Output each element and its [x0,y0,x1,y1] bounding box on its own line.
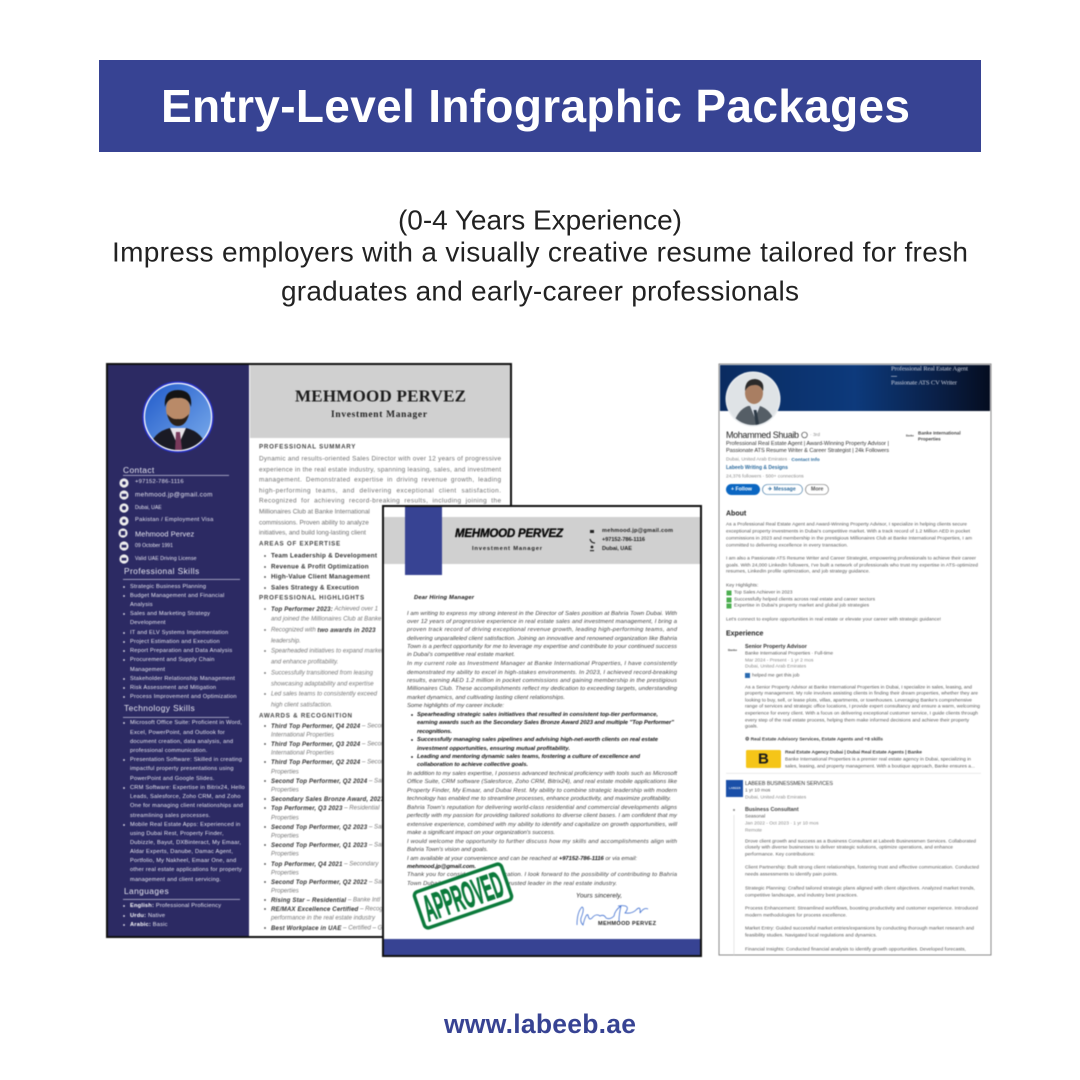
professional skills section: Stakeholder Relationship Management [130,676,235,682]
awards and recognition: Second Top Performer, Q2 2022 – Sales [271,878,389,886]
languages section: Arabic: Basic [130,922,168,928]
technology skills section: CRM Software: Expertise in Bitrix24, Hello [130,785,245,791]
experience section: Labeeb: Business Consultant [745,807,799,813]
letter body text: collaboration to achieve collective goals. [417,762,528,768]
profile banner [720,365,990,411]
experience section: Labeeb: needs assessments to identify pain points. [745,872,838,878]
experience section: Banke: ⚙ Real Estate Advisory Services, Estate Agents and +8 skills [745,736,883,742]
awards and recognition: Properties [271,786,299,794]
letter body text: Town is a perfect opportunity for me to leverage my expertise and contribute to your continued success [407,644,677,650]
profile banner: Professional Real Estate Agent [891,366,968,372]
profile name and headline: Labeeb Writing & Designs [726,465,788,471]
awards and recognition: Properties [271,850,299,858]
experience section: Labeeb: modern methodologies for process excellence. [745,912,847,918]
letter body text: extensive experience, combined with my ability to identify and capitalize on growth opportunities, will [407,822,678,828]
professional highlights: Spearheaded initiatives to expand market [271,648,383,654]
letter body text: over 12 years of progressive experience in real estate sales and investment management, I bring a [407,619,678,625]
about section: commissions in 2023 and membership in the prestigious Millionaires Club at Banke International Properties, I am [726,536,972,542]
awards and recognition: Properties [271,768,299,776]
areas of expertise: Revenue & Profit Optimization [271,564,369,570]
letter body text [406,611,678,887]
awards and recognition: Second Top Performer, Q2 2023 – Sales [271,824,389,830]
icon: profile photo [726,372,780,426]
profile banner: Passionate ATS CV Writer [891,380,958,386]
cover letter footer bar [384,939,700,955]
languages section: English: Professional Proficiency [130,903,221,909]
professional highlights: Recognized with two awards in 2023 [271,626,376,634]
letter body text: results, earning AED 1.2 million in pocket commissions and gaining membership in the prestigious [407,678,677,684]
experience section: Banke: Banke International Properties is a premier real estate agency in Dubai, specializing in [785,756,971,762]
awards and recognition: International Properties [271,750,334,756]
technology skills section: streamlining sales processes. [130,813,211,819]
experience section: Labeeb [726,780,979,955]
letter sign-off and signature: Yours sincerely, [576,892,622,900]
profile name and headline: Professional Real Estate Agent | Award-Winning Property Advisor | [726,441,889,447]
letter body text: Leading and mentoring dynamic sales teams, fostering a culture of excellence and [417,754,640,760]
profile action buttons: More [811,486,824,492]
letter body text: investment opportunities, ensuring mutual profitability. [417,746,570,752]
cover letter header: Investment Manager [472,546,543,552]
professional summary: management. Demonstrated expertise in driving revenue growth, leading [259,476,501,484]
letter body text: In addition to my sales expertise, I possess advanced technical proficiency with tools such as Microsoft [407,771,677,777]
languages section: Languages [124,886,169,896]
contact list with icons: 09 October 1991 [135,543,173,549]
experience section: Banke: experience for every client. With a focus on delivering exceptional customer service, I guide clients through [745,710,978,716]
awards and recognition: Top Performer, Q3 2023 – Residential [271,804,380,812]
technology skills section: professional communication. [130,748,208,754]
experience section: Banke: Experience [726,630,763,638]
panel: LinkedIn profile sample [719,364,991,955]
professional highlights: high client satisfaction. [271,702,332,708]
letter body text: In my current role as Investment Manager at Banke International Properties, I have consistently [407,661,678,667]
about section: resumes, LinkedIn profile optimization, and job strategy guidance. [726,568,870,574]
professional summary: Recognized for achieving record-breaking results, including joining the [259,498,501,504]
cover letter contact details [590,528,673,552]
letter body text: Property Finder, My Emaar, and Dubai Rest. My ability to combine strategic leadership with modern [407,788,678,794]
professional highlights: PROFESSIONAL HIGHLIGHTS [259,594,365,602]
areas of expertise: Team Leadership & Development [271,552,378,560]
experience section: Banke: every step of the real estate process, helping them make informed decisions and achieve their property [745,718,970,724]
professional skills section: Management [130,667,165,673]
professional highlights: showcasing adaptability and expertise [271,680,374,688]
experience section: Banke: Real Estate Agency Dubai | Dubai Real Estate Agents | Banke [785,750,922,756]
awards and recognition: performance in the real estate industry [270,914,376,922]
subtitle text block [112,204,968,306]
letter body text: I am writing to express my strong interest in the Director of Sales position at Bahria Town Dubai. With [407,611,677,617]
awards and recognition: Best Workplace in UAE – Certified – Great [271,924,393,932]
technology skills section: other real estate applications for property [130,867,242,873]
technology skills section: Aldar Experts, Danube, Damac Agent, [130,849,233,855]
profile name and headline: Mohammed Shuaib [726,430,799,440]
professional summary: high-performing teams, and delivering exceptional client satisfaction. [259,488,501,494]
resume sidebar [108,365,249,936]
about section: Let's connect to explore opportunities in real estate or elevate your career with strategic guidance! [726,616,941,622]
experience section: Labeeb: Dubai, United Arab Emirates [745,794,807,800]
experience section: Banke [726,630,981,774]
experience section: Banke: Banke [728,648,737,652]
about section [726,510,978,622]
professional skills section [123,566,240,700]
technology skills section: Excel, PowerPoint, and Outlook for [130,730,225,736]
experience section: Labeeb: Financial Insights: Conducted financial analysis to identify growth opportunities. Developed forecasts, [745,946,966,952]
title banner: Entry-Level Infographic Packages [161,80,910,132]
letter sign-off and signature: MEHMOOD PERVEZ [598,921,657,927]
experience section: Banke: property management. My role involves assisting clients in finding their dream properties, whether they are [745,690,978,696]
resume header with name: Investment Manager [331,410,427,420]
title banner [99,60,981,152]
languages section: Urdu: Native [130,913,165,919]
professional summary: experience in the real estate industry, spanning leasing, sales, and investment [259,466,501,474]
profile action buttons: ✈ Message [768,486,796,492]
technology skills section [123,703,245,883]
professional highlights: and joined the Millionaires Club at Banke [271,616,382,622]
professional summary: PROFESSIONAL SUMMARY [259,444,356,450]
awards and recognition: Properties [271,870,299,876]
experience section: Labeeb: feasibility studies. Navigated local regulations and dynamics. [745,932,877,938]
professional highlights: Successfully transitioned from leasing [271,670,374,676]
experience section: Labeeb: LABEEB [729,786,741,790]
cover letter contact details: Dubai, UAE [602,546,632,552]
awards and recognition: Top Performer, Q4 2021 – Secondary [271,860,379,868]
letter sign-off and signature [576,892,657,927]
professional skills section: Analysis [130,602,153,608]
professional highlights: Top Performer 2023: Achieved over 1 [271,606,378,612]
awards and recognition [259,712,398,932]
letter body text: market dynamics, and cultivating lasting client relationships. [407,695,565,701]
technology skills section: PowerPoint and Google Slides. [130,776,215,782]
experience section: Banke: goals. [745,724,758,730]
areas of expertise [259,540,378,592]
awards and recognition: AWARDS & RECOGNITION [259,712,353,720]
professional highlights: leadership. [271,638,301,644]
professional skills section: Process Improvement and Optimization [130,694,237,700]
contact heading: Contact [123,465,155,475]
profile name and headline: 24,376 followers · 500+ connections [726,474,804,480]
professional summary: Millionaires Club at Banke International [259,508,370,516]
experience section: Banke: As a Senior Property Advisor at Banke International Properties in Dubai, I specialize in sales, leasing, and [745,684,972,690]
experience section: Banke: looking to buy, sell, or lease plots, villas, apartments, or townhouses. Leveraging Banke's comprehensive [745,698,972,704]
professional skills section: Procurement and Supply Chain [130,657,215,663]
letter body text: perfectly with my passion for providing tailored solutions to diverse client bases. I am confident that my [406,813,678,819]
experience section: Banke: Dubai, United Arab Emirates [745,664,807,670]
letter salutation: Dear Hiring Manager [414,595,475,601]
areas of expertise: Sales Strategy & Execution [271,584,359,592]
experience section: Banke: Senior Property Advisor [745,644,808,650]
awards and recognition: Properties [271,814,299,822]
letter body text: Town Dubai's continued growth as a trusted leader in the real estate industry. [407,881,617,887]
professional summary: commissions. Proven ability to analyze [259,520,369,526]
about section: As a Professional Real Estate Agent and Award-Winning Property Advisor, I specialize in helping clients secure [726,522,967,528]
experience section: Labeeb: Remote [745,828,762,834]
awards and recognition: Third Top Performer, Q3 2024 – Second [271,740,388,748]
professional skills section: IT and ELV Systems Implementation [130,630,228,636]
professional skills section: Development [130,620,166,626]
about section: exceptional property investments in Dubai's competitive market. With a track record of 1.2 Million AED in pocket [726,528,971,534]
experience section: Labeeb: Market Entry: Guided successful market entries/expansions by conducting thorough market research and [745,926,974,932]
current company [906,430,961,442]
professional skills section: Strategic Business Planning [130,584,206,590]
letter body text: mehmood.jp@gmail.com. [407,864,476,870]
cover letter header [384,507,700,575]
profile name and headline: · 3rd [810,432,820,438]
letter body text: Bahria Town's reputation for delivering world-class residential and commercial developments aligns [407,805,677,811]
subtitle text block: Impress employers with a visually creative resume tailored for fresh [112,236,968,268]
awards and recognition: Second Top Performer, Q1 2023 – Sales [271,842,389,848]
technology skills section: Portfolio, My Nakheel, Emaar One, and [130,858,236,864]
technology skills section: document creation, data analysis, and [130,739,233,745]
about section: Expertise in Dubai's property market and global job strategies [734,602,870,608]
professional skills section: Risk Assessment and Mitigation [130,685,216,691]
experience section: Labeeb: 1 yr 10 mos [745,788,771,794]
experience section: Banke: helped me get this job [752,672,800,678]
experience section: Banke: Mar 2024 - Present · 1 yr 2 mos [745,658,814,664]
experience section: Labeeb: closely with diverse businesses to deliver strategic solutions, optimize operations, and enhance [745,844,953,850]
professional skills section: Project Estimation and Execution [130,639,220,645]
letter body text: delivering unparalleled client satisfaction. Joining an innovative and renowned organization like Bahria [407,636,678,642]
profile name and headline [726,430,889,480]
contact list with icons: Valid UAE Driving License [135,556,197,562]
technology skills section: Dubizzle, Bayut, DXBinteract, My Emaar, [130,840,241,846]
panel: cover letter sample [383,506,701,956]
experience section: Labeeb: competitive landscape, and industry best practices. [745,892,858,898]
technology skills section: management and client servicing. [130,877,221,883]
awards and recognition: Third Top Performer, Q4 2024 – Second [271,722,388,730]
experience section: Labeeb: Strategic Planning: Crafted tailored strategic plans aligned with client objectives. Analyzed market trends, [745,886,975,892]
professional summary: initiatives, and build long-lasting client [259,530,366,536]
technology skills section: impactful property presentations using [130,766,234,772]
areas of expertise: AREAS OF EXPERTISE [259,540,341,548]
letter body text: Some highlights of my career include: [407,703,504,709]
technology skills section: One for managing client relationships and [130,803,243,809]
letter body text: Thank you for considering my application. I look forward to the possibility of contributing to Bahria [407,872,678,878]
professional highlights: Led sales teams to consistently exceed [271,690,378,698]
experience section: Labeeb: Jan 2022 - Oct 2023 · 1 yr 10 mos [745,820,819,826]
awards and recognition: RE/MAX Excellence Certified – Recognized [271,906,398,912]
experience section: Labeeb: LABEEB BUSINESSMEN SERVICES [745,781,833,787]
cover letter header: MEHMOOD PERVEZ [455,528,564,540]
cover letter contact details: +97152-786-1116 [602,537,645,543]
professional skills section: Professional Skills [124,566,200,576]
resume header with name [250,365,510,438]
subtitle text block: graduates and early-career professionals [281,276,799,306]
technology skills section: Technology Skills [124,703,195,713]
technology skills section: Microsoft Office Suite: Proficient in Word, [130,720,242,726]
about section: committed to delivering excellence in every transaction. [726,542,848,548]
awards and recognition: Properties [271,888,299,894]
technology skills section: Mobile Real Estate Apps: Experienced in [130,822,241,828]
awards and recognition: Second Top Performer, Q2 2024 – Sales [271,778,389,784]
contact list with icons: Mehmood Pervez [135,530,195,538]
about section: Successfully helped clients across real estate and career sectors [734,596,876,602]
letter body text: make a significant impact on your organization's success. [407,830,555,836]
panel: cover letter sample: APPROVED [418,864,509,929]
technology skills section: using Dubai Rest, Property Finder, [130,831,224,837]
contact heading [123,465,229,476]
current company: Properties [918,436,941,442]
about section: I am also a Passionate ATS Resume Writer and Career Strategist, empowering professionals to achieve their career [726,556,976,562]
professional summary: Dynamic and results-oriented Sales Director with over 12 years of progressive [259,456,501,462]
experience section: Labeeb: Client Partnership: Built strong client relationships, fostering trust and effective communication. Conducted [745,864,979,870]
icon: profile photo [143,382,213,452]
professional summary [259,444,501,536]
about section: About [726,510,747,518]
letter body text: proven track record of driving exceptional revenue growth, leading high-performing teams, and [406,627,678,633]
letter body text: Millionaires Club. These accomplishments reflect my dedication to exceeding targets, understanding [407,686,678,692]
approved stamp [413,862,513,931]
letter body text: Office Suite, CRM software (Salesforce, Zoho CRM, Bitrix24), and real estate mobile applications like [407,779,678,785]
panel: resume sample [107,364,511,937]
awards and recognition: International Properties [271,732,334,738]
letter body text: earning awards such as the Secondary Sales Bronze Award 2023 and multiple "Top Performer" [417,720,674,726]
footer website link: www.labeeb.ae [443,1009,636,1039]
about section: Top Sales Achiever in 2023 [734,590,793,596]
professional highlights [259,594,383,708]
about section: Key Highlights: [726,582,758,588]
letter body text: Bahria Town's vision and goals. [407,847,488,853]
experience section: Banke: B [758,750,769,768]
contact list with icons: Pakistan / Employment Visa [135,517,214,523]
awards and recognition: Third Top Performer, Q2 2024 – Second [271,758,388,766]
professional highlights: and enhance profitability. [271,658,338,666]
contact list with icons: mehmood.jp@gmail.com [135,492,213,498]
contact list with icons [118,478,214,564]
awards and recognition: Properties [271,832,299,840]
current company: Banke [906,434,914,438]
experience section: Labeeb: performance. Key contributions: [745,852,815,858]
letter body text: Spearheading strategic sales initiatives that resulted in consistent top-tier performance, [417,712,658,718]
profile name and headline: Passionate ATS Resume Writer & Career Strategist | 24k Followers [726,448,889,454]
technology skills section: Presentation Software: Skilled in creating [130,757,242,763]
experience section: Banke: Banke International Properties · Full-time [745,650,833,656]
experience section: Banke: range of services and strategic office locations, I provide expert consultancy and ensure a warm, welcoming [745,704,980,710]
professional skills section: Sales and Marketing Strategy [130,611,210,617]
contact list with icons: Dubai, UAE [135,505,162,511]
letter body text: technology has enabled me to streamline processes, enhance productivity, and maximize profitability. [407,796,671,802]
profile action buttons [726,484,828,495]
experience section: Labeeb: Seasonal [745,814,765,820]
letter body text: I am available at your convenience and can be reached at +97152-786-1116 or via email: [407,856,637,862]
professional skills section: Budget Management and Financial [130,593,224,599]
profile name and headline: Dubai, United Arab Emirates · Contact Info [726,456,820,462]
resume header with name: MEHMOOD PERVEZ [295,386,466,406]
awards and recognition: Rising Star – Residential – Banke Intl [271,896,381,904]
languages section [123,886,240,928]
technology skills section: Leads, Salesforce, Zoho CRM, and Zoho [130,794,241,800]
experience section: Banke: sales, leasing, and property management. With a boutique approach, Banke ensures a... [785,764,975,770]
experience section: Labeeb: Process Enhancement: Streamlined workflows, boosting productivity and customer experience. Introduced [745,906,978,912]
cover letter contact details: mehmood.jp@gmail.com [602,528,673,534]
profile action buttons: + Follow [731,486,753,492]
areas of expertise: High-Value Client Management [271,574,371,580]
experience section: Labeeb: Drove client growth and success as a Business Consultant at Labeeb Businessmen Services. Collaborated [745,838,976,844]
letter body text: Successfully managing sales pipelines and advising high-net-worth clients on real estate [417,737,659,743]
about section: goals. With 24,000 LinkedIn followers, I've built a network of professionals who trust my expertise in ATS-optimized [726,562,978,568]
letter body text: in Dubai's competitive real estate market. [407,652,515,658]
letter body text: I would welcome the opportunity to further discuss how my skills and accomplishments align with [407,839,677,845]
professional skills section: Report Preparation and Data Analysis [130,648,232,654]
current company: Banke International [918,430,961,436]
contact list with icons: +97152-786-1116 [135,479,184,485]
subtitle text block: (0-4 Years Experience) [398,204,682,236]
letter body text: demonstrated my ability to excel in high-stakes environments. In 2023, I achieved record-breaking [407,670,678,676]
letter body text: recognitions. [417,729,452,735]
awards and recognition: Secondary Sales Bronze Award, 2023 [271,796,385,802]
